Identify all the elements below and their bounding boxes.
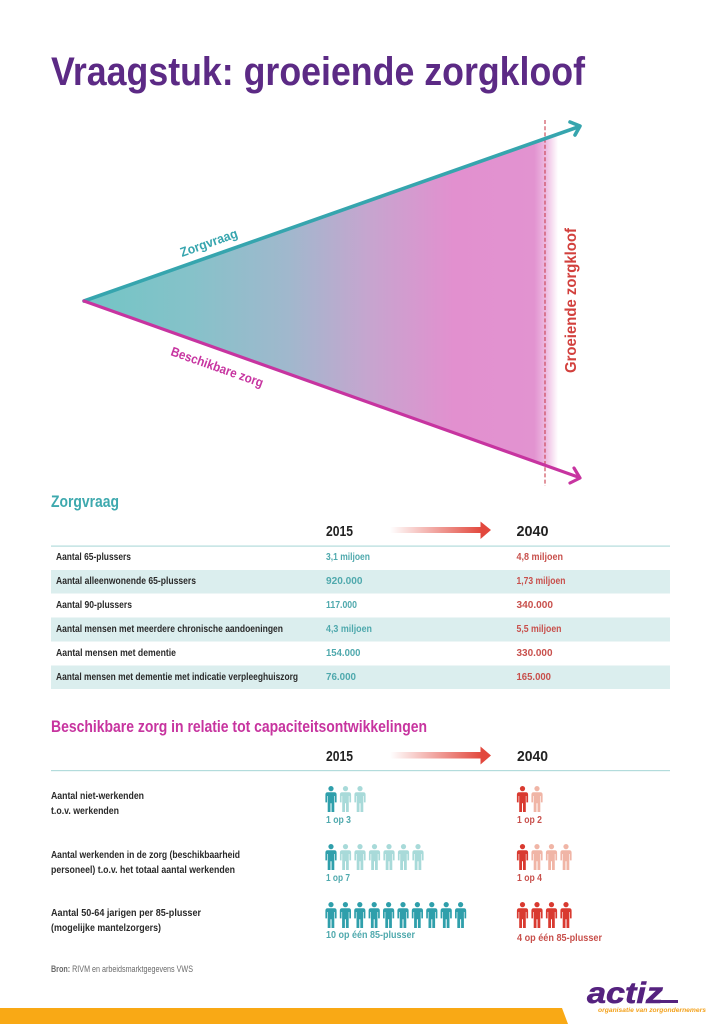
arrow: 2015 to 2040 (390, 746, 491, 764)
panel: beschikbare zorg (51, 718, 670, 944)
row: 90-plussers: 340.000 (516, 599, 553, 611)
row label: werkenden in de zorg: personeel) t.o.v. het totaal aantal werkenden (51, 864, 235, 876)
label: beschikbare zorg: Beschikbare zorg (169, 344, 265, 390)
heading: zorgvraag: Zorgvraag (51, 492, 119, 511)
value: 4 op een 85-plusser: 4 op één 85-plusser (517, 932, 602, 944)
year 2015: 2015 (326, 748, 353, 765)
icons: 1 op 7, 2015 (325, 844, 424, 870)
row label: niet-werkenden (51, 790, 144, 817)
row: 65-plussers: 4,8 miljoen (516, 551, 563, 563)
row: 90-plussers: Aantal 90-plussers (56, 599, 132, 611)
row: 90-plussers: 117.000 (326, 599, 357, 611)
row: alleenwonende 65-plussers: Aantal alleenwonende 65-plussers (56, 575, 196, 587)
dashed line 2040 (544, 120, 546, 486)
row: dementie met indicatie verpleeghuiszorg: 165.000 (516, 671, 551, 683)
panel: zorgvraag table (51, 492, 670, 689)
row: alleenwonende 65-plussers: 920.000 (326, 575, 363, 587)
row label: niet-werkenden: t.o.v. werkenden (51, 805, 119, 817)
row label: 50-64 jarigen: Aantal 50-64 jarigen per 85-plusser (51, 907, 201, 919)
row label: werkenden in de zorg: Aantal werkenden in de zorg (beschikbaarheid (51, 849, 240, 861)
arrow: beschikbare zorg (84, 301, 580, 483)
label: zorgvraag: Zorgvraag (178, 226, 240, 260)
row: meerdere chronische aandoeningen: Aantal mensen met meerdere chronische aandoeningen (56, 623, 283, 635)
value: 1 op 7: 1 op 7 (326, 872, 350, 884)
row: dementie met indicatie verpleeghuiszorg: 76.000 (326, 671, 356, 683)
row label: werkenden in de zorg (51, 849, 240, 876)
row: dementie (56, 647, 553, 659)
row: dementie: Aantal mensen met dementie (56, 647, 176, 659)
arrow: zorgvraag (84, 122, 580, 301)
row: dementie: 330.000 (516, 647, 553, 659)
row label: niet-werkenden: Aantal niet-werkenden (51, 790, 144, 802)
arrow: 2015 to 2040 (390, 522, 491, 539)
title: Vraagstuk: groeiende zorgkloof (51, 50, 586, 94)
logo: actiz (587, 977, 707, 1014)
value: 1 op 3: 1 op 3 (326, 814, 351, 826)
row label: 50-64 jarigen (51, 907, 201, 934)
icons: 1 op 4, 2040 (517, 844, 572, 870)
year 2015: 2015 (326, 523, 353, 540)
value: 1 op 2: 1 op 2 (517, 814, 542, 826)
label: groeiende zorgkloof: Groeiende zorgkloof (563, 227, 580, 373)
gradient gap area (84, 134, 558, 469)
heading: beschikbare zorg: Beschikbare zorg in relatie tot capaciteitsontwikkelingen (51, 718, 427, 736)
triangle chart: groeiende zorgkloof (84, 120, 580, 486)
footer bar (0, 1008, 568, 1024)
value: 1 op 4: 1 op 4 (517, 872, 542, 884)
row: dementie met indicatie verpleeghuiszorg: Aantal mensen met dementie met indicatie verpleeghuiszorg (56, 671, 298, 683)
row: alleenwonende 65-plussers: 1,73 miljoen (516, 575, 566, 587)
icons: 1 op 3, 2015 (325, 786, 366, 812)
value: 10 op een 85-plusser: 10 op één 85-plusser (326, 929, 415, 941)
logo: actiz: actiz (587, 977, 663, 1010)
row: meerdere chronische aandoeningen: 5,5 miljoen (516, 623, 562, 635)
icons: 1 op 2, 2040 (517, 786, 543, 812)
icons: 10 op een, 2015 (325, 902, 466, 928)
year 2040: 2040 (516, 523, 548, 540)
row: 65-plussers (56, 551, 563, 563)
source note: Bron: RIVM en arbeidsmarktgegevens VWS (51, 964, 193, 974)
row: meerdere chronische aandoeningen: 4,3 miljoen (326, 623, 372, 635)
logo tagline: organisatie van zorgondernemers (598, 1008, 707, 1014)
icons: 4 op een, 2040 (517, 902, 572, 928)
row: dementie: 154.000 (326, 647, 361, 659)
row: meerdere chronische aandoeningen (56, 623, 562, 635)
row: dementie met indicatie verpleeghuiszorg (56, 671, 551, 683)
row: alleenwonende 65-plussers (56, 575, 566, 587)
row: 90-plussers (56, 599, 553, 611)
row: 65-plussers: 3,1 miljoen (326, 551, 370, 563)
row label: 50-64 jarigen: (mogelijke mantelzorgers) (51, 922, 161, 934)
year 2040: 2040 (517, 748, 548, 765)
row: 65-plussers: Aantal 65-plussers (56, 551, 131, 563)
